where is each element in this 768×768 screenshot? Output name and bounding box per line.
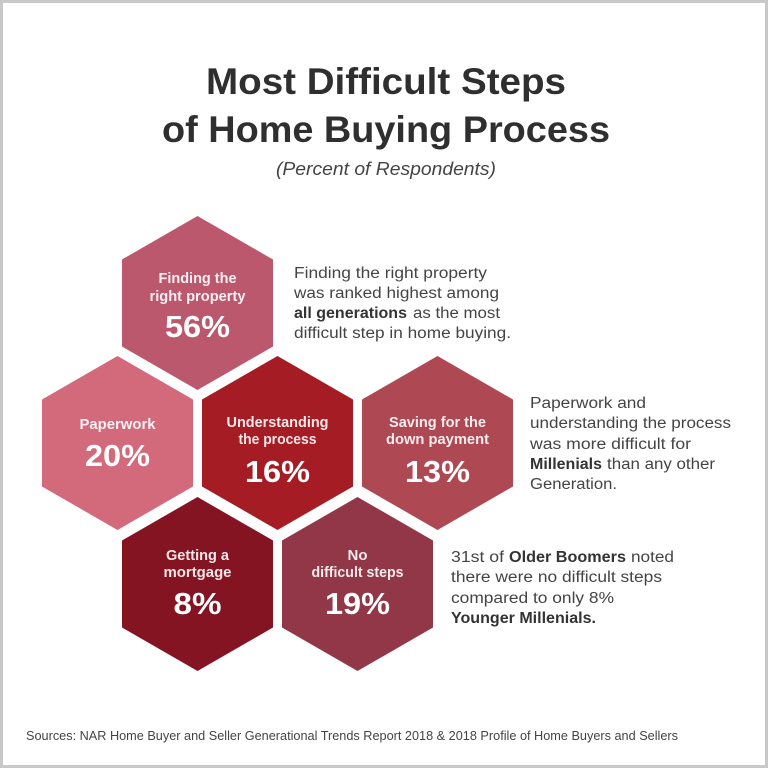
- text block: older boomers note: noted: [631, 549, 674, 566]
- hexagon: finding the right property: 56%: [165, 309, 230, 344]
- hexagon: getting a mortgage: Getting a: [166, 548, 230, 564]
- hexagon: paperwork: Paperwork: [80, 417, 156, 433]
- hexagon: saving for the down payment: [362, 356, 513, 530]
- hexagon: getting a mortgage: 8%: [174, 586, 222, 621]
- hexagon: saving for the down payment: 13%: [405, 454, 470, 489]
- text block: paperwork note: Millenials: [530, 456, 602, 473]
- hexagon: no difficult steps: [282, 497, 433, 671]
- hexagon: understanding the process: the process: [238, 432, 316, 448]
- hexagon: finding the right property: right property: [150, 289, 246, 305]
- text block: paperwork note: Generation.: [530, 476, 617, 493]
- hexagon: no difficult steps: No: [348, 548, 368, 564]
- hexagon: finding the right property: Finding the: [158, 271, 236, 287]
- text block: paperwork note: [529, 395, 731, 493]
- text block: paperwork note: than any other: [607, 456, 715, 473]
- hexagon: paperwork: 20%: [85, 438, 150, 473]
- hexagon: finding the right property: [122, 216, 273, 390]
- text block: older boomers note: Older Boomers: [509, 549, 626, 566]
- text block: paperwork note: understanding the process: [530, 415, 731, 432]
- hexagon: understanding the process: 16%: [245, 454, 310, 489]
- hexagon: getting a mortgage: mortgage: [164, 565, 232, 581]
- text block: finding the right property note: as the most: [413, 305, 501, 322]
- sources: Sources: NAR Home Buyer and Seller Generational Trends Report 2018 & 2018 Profile of Home Buyers and Sellers: [26, 729, 678, 743]
- text block: older boomers note: 31st of: [451, 549, 505, 566]
- text block: finding the right property note: [293, 265, 511, 342]
- title: of Home Buying Process: [162, 109, 610, 150]
- hexagon: no difficult steps: 19%: [325, 586, 390, 621]
- hexagon: saving for the down payment: Saving for the: [389, 415, 486, 431]
- hexagon: understanding the process: [202, 356, 353, 530]
- hexagon: paperwork: [42, 356, 193, 530]
- text block: paperwork note: was more difficult for: [529, 436, 691, 453]
- text block: older boomers note: there were no difficult steps: [451, 569, 662, 586]
- hexagon: getting a mortgage: [122, 497, 273, 671]
- text block: finding the right property note: difficult step in home buying.: [294, 325, 511, 342]
- text block: paperwork note: Paperwork and: [530, 395, 646, 412]
- text block: finding the right property note: all generations: [294, 305, 407, 322]
- text block: older boomers note: compared to only 8%: [451, 590, 614, 607]
- hexagon: understanding the process: Understanding: [226, 415, 328, 431]
- text block: older boomers note: Younger Millenials.: [451, 610, 596, 627]
- hexagon: saving for the down payment: down payment: [386, 432, 489, 448]
- subtitle: (Percent of Respondents): [276, 159, 496, 179]
- title: [162, 61, 610, 150]
- text block: finding the right property note: was ranked highest among: [293, 285, 499, 302]
- title: Most Difficult Steps: [206, 61, 566, 102]
- text block: older boomers note: [451, 549, 674, 627]
- hexagon: no difficult steps: difficult steps: [312, 565, 404, 581]
- text block: finding the right property note: Finding the right property: [294, 265, 487, 282]
